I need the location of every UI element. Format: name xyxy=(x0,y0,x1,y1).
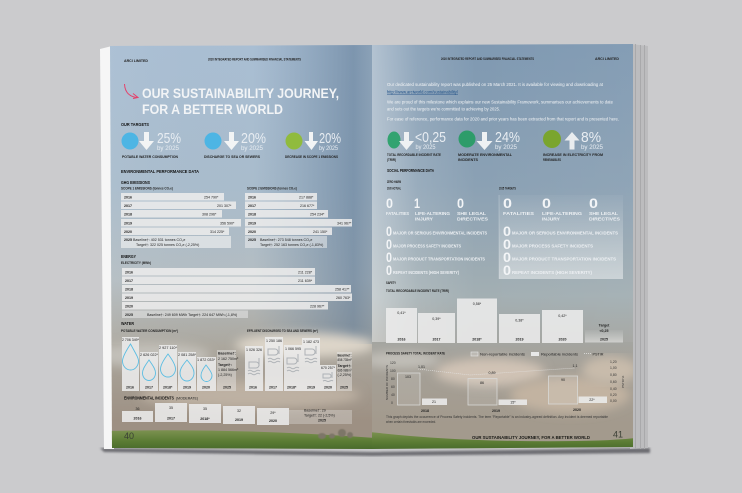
chart: potable water: (-2,25%) xyxy=(218,373,232,377)
chart: scope 1 emissions: 254 790* xyxy=(204,195,219,199)
chart: effluent: 1 066 595 xyxy=(285,347,301,351)
chart: effluent: 2017 xyxy=(269,386,277,390)
chart: process safety: 22* xyxy=(589,398,595,402)
target: environmental incidents: INCIDENTS xyxy=(458,158,479,162)
target: environmental incidents: 24% xyxy=(495,129,520,146)
chart: process safety: PSTIR % xyxy=(621,375,625,388)
chart: potable water: 1 884 566m³ xyxy=(218,368,239,372)
chart: potable water: 2016 xyxy=(126,386,134,390)
chart: scope 2 emissions: SCOPE 2 EMISSIONS (tonnes CO₂e) xyxy=(247,186,298,190)
panel: 2025 targets: REPEAT INCIDENTS (HIGH SEVERITY) xyxy=(512,270,593,275)
right page content xyxy=(385,57,625,440)
panel: 2025 targets: MAJOR OR SERIOUS ENVIRONMENTAL INCIDENTS xyxy=(512,230,618,236)
chart: process safety: 1,20 xyxy=(610,360,617,364)
target: renewables: INCREASE IN ELECTRICITY FROM xyxy=(543,153,603,157)
legend xyxy=(471,352,604,356)
chart: environmental incidents: Baseline†: 29 xyxy=(304,408,326,412)
panel: 2020 actual: MAJOR PROCESS SAFETY INCIDENTS xyxy=(393,244,461,248)
chart: energy electricity: 2025 xyxy=(125,313,133,317)
chart: potable water: 2 927 110* xyxy=(159,346,178,350)
intro text: For ease of reference, performance data for 2020 and prior years has been extracted from that report and is presented here. xyxy=(387,116,619,122)
chart: energy electricity: 2018 xyxy=(125,287,133,291)
chart: process safety: 0 xyxy=(391,401,393,405)
chart: environmental incidents: 2017 xyxy=(167,416,175,420)
chart: TRIR: 2016 xyxy=(398,338,406,342)
chart: potable water: Baseline†: xyxy=(218,352,236,356)
panel: 2020 actual: 0 xyxy=(386,223,392,239)
chart: process safety: 0,20 xyxy=(610,393,617,397)
chart: process safety: 1,1 xyxy=(572,364,578,368)
chart: TRIR: 2020 xyxy=(558,338,566,342)
intro text: We are proud of this milestone which explains our new Sustainability Framework, summarises our achievements to date xyxy=(387,100,614,104)
chart: process safety: 80 xyxy=(391,377,395,381)
chart: scope 2 emissions: 2019 xyxy=(248,221,256,225)
page number 40: 40 xyxy=(124,431,134,441)
chart: environmental incidents: ENVIRONMENTAL INCIDENTS xyxy=(124,396,174,400)
chart: scope 2 emissions: 217 888* xyxy=(299,195,314,199)
chart: process safety: 15* xyxy=(510,400,516,404)
panel: 2025 targets: 0 xyxy=(589,195,598,211)
panel: 2025 targets: 2025 TARGETS xyxy=(499,186,516,190)
target: renewables xyxy=(543,129,603,162)
target: environmental incidents: MODERATE ENVIRONMENTAL xyxy=(458,153,513,157)
panel: 2025 targets: FATALITIES xyxy=(503,211,534,216)
chart: process safety: 103 xyxy=(405,375,411,379)
chart: environmental incidents xyxy=(122,396,352,425)
chart: scope 2 emissions: 2017 xyxy=(248,204,256,208)
chart: energy electricity: 211 639* xyxy=(298,279,313,283)
chart: effluent: 2025 xyxy=(340,386,348,390)
chart: effluent: 2016 xyxy=(249,386,257,390)
target: scope 1: by 2025 xyxy=(319,145,338,152)
target: scope 1: DECREASE IN SCOPE 1 EMISSIONS xyxy=(285,155,339,159)
chart: TRIR: 0,42* xyxy=(558,314,567,318)
chart: process safety: 0,40 xyxy=(610,387,617,391)
chart: TRIR: 2017 xyxy=(432,338,440,342)
chart: TRIR xyxy=(386,281,623,343)
panel: 2020 actual: 0 xyxy=(386,262,392,278)
chart: effluent: 2020 xyxy=(324,386,332,390)
target: TRIR: (TRIR) xyxy=(387,158,397,162)
chart: TRIR: 0,41* xyxy=(397,311,406,315)
page edge left xyxy=(100,46,114,449)
footnote xyxy=(386,415,608,424)
panel: 2020 actual: SHE LEGAL xyxy=(457,211,486,216)
chart: potable water: WATER xyxy=(121,321,135,326)
chart: process safety: 60 xyxy=(391,385,395,389)
chart: process safety xyxy=(385,352,625,413)
chart: process safety: 0,60 xyxy=(610,380,617,384)
chart: scope 1 emissions: 314 225* xyxy=(210,230,225,234)
chart: energy electricity: 2016 xyxy=(125,270,133,274)
chart: scope 2 emissions: 254 234* xyxy=(310,212,325,216)
chart: process safety: 2018 xyxy=(421,409,429,413)
panel: 2025 targets: 0 xyxy=(503,262,511,278)
panel: 2020 actual: INJURY xyxy=(415,216,433,222)
target: renewables: 8% xyxy=(581,129,601,146)
chart: potable water: 2017 xyxy=(145,386,153,390)
panel: 2025 targets: 0 xyxy=(503,223,511,239)
chart: scope 1 emissions: 2025 xyxy=(124,238,132,242)
panel: 2020 actual: 2020 ACTUAL xyxy=(387,186,401,190)
title xyxy=(142,86,339,117)
footnote: This graph depicts the occurrence of Process Safety incidents. The term "Reportable" is an industry-agreed definition. Any incident is deemed reportable xyxy=(386,415,608,419)
target: TRIR: <0,25 xyxy=(415,129,446,146)
panel: 2025 targets: MAJOR PRODUCT TRANSPORTATION INCIDENTS xyxy=(512,256,616,262)
target: scope 1 xyxy=(285,130,341,159)
chart: scope 2 emissions: 2025 xyxy=(248,238,256,242)
chart: energy electricity: Baseline†: 249 609 MWh Target†: 224 647 MWh (-1,8%) xyxy=(147,313,237,317)
chart: process safety: 90 xyxy=(561,378,565,382)
chart: TRIR: 0,58* xyxy=(473,302,482,306)
panel: 2025 targets: 0 xyxy=(503,236,511,252)
chart: process safety: NUMBER OF INCIDENTS xyxy=(385,365,389,400)
chart: process safety: 21 xyxy=(432,400,436,404)
running header right: 2020 INTEGRATED REPORT AND SUMMARISED FINANCIAL STATEMENTS xyxy=(441,57,534,61)
chart: scope 2 emissions: 216 677* xyxy=(300,204,315,208)
panel: 2020 actual: 0 xyxy=(386,236,392,252)
chart: energy electricity: 260 763* xyxy=(336,296,351,300)
target: TRIR xyxy=(387,129,446,162)
chart: potable water: POTABLE WATER CONSUMPTION (m³) xyxy=(121,329,179,333)
chart: environmental incidents: 35 xyxy=(203,407,207,411)
chart: energy electricity: 228 967* xyxy=(310,304,325,308)
chart: potable water: 2018* xyxy=(163,386,173,390)
chart: potable water: 2 162 750m³ xyxy=(218,357,239,361)
target: environmental incidents xyxy=(458,129,520,162)
heading: our targets: OUR TARGETS xyxy=(121,122,149,127)
chart: scope 1 emissions: 2020 xyxy=(124,230,132,234)
legend: PSTIR xyxy=(592,352,604,356)
target: discharge: 20% xyxy=(241,130,266,147)
chart: energy electricity: ELECTRICITY (MWh) xyxy=(121,261,152,265)
chart: environmental incidents: 2018* xyxy=(200,417,210,421)
panel: 2020 actual xyxy=(386,180,488,278)
chart: process safety: 100 xyxy=(390,369,396,373)
chart: effluent: (-2,25%) xyxy=(338,373,351,377)
chart: potable water: 2025 xyxy=(223,386,231,390)
chart: effluent: Baseline†: xyxy=(338,354,352,358)
chart: potable water: 2 081 258* xyxy=(178,353,197,357)
chart: scope 1 emissions: GHG EMISSIONS xyxy=(121,180,150,185)
chart: process safety: PROCESS SAFETY TOTAL INCIDENT RATE xyxy=(386,352,445,356)
chart: potable water: 2019 xyxy=(183,386,191,390)
chart: environmental incidents: 32 xyxy=(237,409,241,413)
panel: 2020 actual: 0 xyxy=(457,195,464,211)
chart: TRIR: <0,25 xyxy=(599,329,609,333)
chart: TRIR: 0,38* xyxy=(515,318,524,322)
target: scope 1: 20% xyxy=(319,130,341,147)
panel: 2020 actual: ZERO HARM xyxy=(387,180,401,184)
chart: TRIR: 2025 xyxy=(600,338,608,342)
chart: scope 1 emissions: 308 296* xyxy=(202,212,217,216)
panel: 2020 actual: LIFE-ALTERING xyxy=(415,211,451,216)
running header left xyxy=(124,58,301,63)
chart: scope 1 emissions: SCOPE 1 EMISSIONS (tonnes CO₂e) xyxy=(121,186,174,190)
chart: environmental incidents: 2025 xyxy=(318,418,326,422)
chart: process safety: 0,00 xyxy=(610,399,617,403)
page edge stack right xyxy=(630,44,648,449)
target: potable water xyxy=(122,130,181,159)
legend: Reportable incidents xyxy=(541,352,578,356)
target: potable water: POTABLE WATER CONSUMPTION xyxy=(122,155,178,159)
chart: potable water: 2 626 022* xyxy=(140,353,159,357)
chart: energy electricity: 2020 xyxy=(125,304,133,308)
intro text: Our dedicated sustainability report was published on 25 March 2021. It is available for viewing and downloading at xyxy=(387,82,604,87)
chart: environmental incidents: (MODERATE) xyxy=(176,396,198,400)
chart: scope 2 emissions xyxy=(245,186,352,248)
running header left: ARCI LIMITED xyxy=(124,59,148,63)
panel: 2020 actual: DIRECTIVES xyxy=(457,216,488,222)
chart: effluent: 2019 xyxy=(307,386,315,390)
target: discharge: by 2025 xyxy=(241,145,263,152)
target: renewables: RENEWABLES xyxy=(543,158,561,162)
heading: environmental performance data: ENVIRONMENTAL PERFORMANCE DATA xyxy=(121,169,200,174)
chart: effluent: 1 026 326 xyxy=(246,348,262,352)
target: potable water: by 2025 xyxy=(157,145,179,152)
panel: 2025 targets: DIRECTIVES xyxy=(589,216,620,222)
target: renewables: by 2025 xyxy=(581,144,603,151)
chart: potable water: Target†: xyxy=(218,363,232,367)
chart: process safety: 0,89 xyxy=(488,371,496,375)
chart: scope 1 emissions: Baseline†: 402 531 tonnes CO₂e xyxy=(133,238,185,242)
chart: scope 1 emissions: 2016 xyxy=(124,195,132,199)
chart: TRIR: TOTAL RECORDABLE INCIDENT RATE (TRIR) xyxy=(386,289,450,293)
chart: effluent: 1 182 473 xyxy=(303,340,319,344)
chart: scope 2 emissions: Baseline†: 273 548 tonnes CO₂e xyxy=(260,238,312,242)
left page content xyxy=(121,58,352,441)
heading: social performance data: SOCIAL PERFORMANCE DATA xyxy=(387,168,434,173)
legend: Non-reportable incidents xyxy=(480,352,525,356)
chart: environmental incidents: 2020 xyxy=(269,419,277,423)
chart: scope 1 emissions: 356 590* xyxy=(220,221,235,225)
chart: energy electricity: 2019 xyxy=(125,296,133,300)
chart: process safety: 1,01 xyxy=(418,365,425,369)
target: discharge: DISCHARGE TO SEA OR SEWERS xyxy=(204,155,261,159)
chart: environmental incidents: 36 xyxy=(136,407,140,411)
chart: energy electricity xyxy=(121,254,352,318)
panel: 2025 targets: SHE LEGAL xyxy=(589,211,618,216)
panel: 2025 targets: 0 xyxy=(503,195,512,211)
chart: scope 2 emissions: Target†: 252 163 tonnes CO₂e (-1,83%) xyxy=(260,243,323,247)
chart: effluent: Target†: xyxy=(338,364,351,368)
running header left: 2020 INTEGRATED REPORT AND SUMMARISED FINANCIAL STATEMENTS xyxy=(208,58,301,62)
chart: process safety: 2019 xyxy=(492,409,500,413)
chart: effluent: 670 257* xyxy=(321,366,336,370)
panel: 2020 actual: FATALITIES xyxy=(386,211,409,216)
panel: 2020 actual: 1 xyxy=(414,195,420,211)
panel: 2020 actual: MAJOR OR SERIOUS ENVIRONMENTAL INCIDENTS xyxy=(393,230,487,236)
chart: environmental incidents: 2019 xyxy=(235,418,243,422)
chart: effluent: 1 250 186 xyxy=(266,339,282,343)
chart: scope 1 emissions: 2017 xyxy=(124,204,132,208)
chart: potable water: 1 872 033* xyxy=(197,358,216,362)
chart: process safety: 86 xyxy=(480,381,484,385)
target: TRIR: by 2025 xyxy=(416,144,436,151)
chart: scope 1 emissions: 2019 xyxy=(124,221,132,225)
chart: potable water: 2 706 349* xyxy=(122,338,140,342)
chart: TRIR: SAFETY xyxy=(386,281,396,285)
chart: process safety: 40 xyxy=(391,393,395,397)
panel: 2025 targets xyxy=(499,186,623,279)
chart: scope 2 emissions: 341 967* xyxy=(337,221,352,225)
chart: scope 2 emissions: 2016 xyxy=(248,195,256,199)
chart: TRIR: 0,39* xyxy=(432,317,441,321)
panel: 2020 actual: 0 xyxy=(386,195,393,211)
footnote: when certain thresholds are exceeded. xyxy=(386,420,436,424)
book shadow xyxy=(100,448,650,456)
chart: environmental incidents: 29* xyxy=(270,411,276,415)
chart: scope 1 emissions: 201 307* xyxy=(217,204,232,208)
intro text: and sets out the targets we're committed to achieving by 2025. xyxy=(387,106,500,112)
chart: process safety: 120 xyxy=(390,361,396,365)
intro text: http://www.arciworld.com/sustainability/ xyxy=(387,90,459,94)
chart: process safety: 0,80 xyxy=(610,373,617,377)
panel: 2025 targets: INJURY xyxy=(542,216,560,222)
footer title: OUR SUSTAINABILITY JOURNEY, FOR A BETTER WORLD xyxy=(472,435,590,440)
panel: 2025 targets: 0 xyxy=(542,195,551,211)
panel: 2020 actual: MAJOR PRODUCT TRANSPORTATION INCIDENTS xyxy=(393,256,485,262)
chart: energy electricity: 2017 xyxy=(125,279,133,283)
left page background xyxy=(90,44,375,452)
target: discharge xyxy=(204,130,266,159)
target: environmental incidents: by 2025 xyxy=(495,144,517,151)
chart: environmental incidents: 35 xyxy=(169,406,173,410)
chart: environmental incidents: Target†: 22 (-2,5%) xyxy=(304,414,335,418)
panel: 2020 actual: REPEAT INCIDENTS (HIGH SEVERITY) xyxy=(393,270,459,275)
chart: process safety: 2020 xyxy=(573,408,581,412)
chart: energy electricity: 211 228* xyxy=(298,270,313,274)
right page background xyxy=(360,42,638,452)
chart: potable water xyxy=(121,321,239,391)
target: TRIR: TOTAL RECORDABLE INCIDENT RATE xyxy=(387,153,441,157)
chart: environmental incidents: 2016 xyxy=(134,416,142,420)
chart: scope 2 emissions: 241 150* xyxy=(313,230,328,234)
chart: effluent xyxy=(245,329,352,391)
chart: TRIR: Target xyxy=(599,324,610,328)
chart: effluent: EFFLUENT DISCHARGED TO SEA AND SEWERS (m³) xyxy=(247,329,319,333)
chart: effluent: 858 735m³ xyxy=(338,358,352,362)
target: potable water: 25% xyxy=(157,130,181,147)
panel: 2025 targets: LIFE-ALTERING xyxy=(542,211,583,216)
chart: energy electricity: ENERGY xyxy=(121,254,136,259)
running header right: ARCI LIMITED xyxy=(595,57,619,61)
icon: red arrow xyxy=(124,84,138,98)
chart: TRIR: 2018* xyxy=(472,338,482,342)
chart: scope 2 emissions: 2020 xyxy=(248,230,256,234)
panel: 2020 actual: 0 xyxy=(386,249,392,265)
title: OUR SUSTAINABILITY JOURNEY, xyxy=(142,86,339,101)
chart: scope 2 emissions: 2018 xyxy=(248,212,256,216)
intro text xyxy=(387,82,619,122)
page number 41: 41 xyxy=(613,430,623,440)
chart: effluent: 686 988m³ xyxy=(338,368,352,372)
chart: potable water: 2020 xyxy=(202,386,210,390)
chart: energy electricity: 258 417* xyxy=(335,287,350,291)
chart: scope 1 emissions: Target†: 322 025 tonnes CO₂e (-2,25%) xyxy=(136,243,199,247)
chart: process safety: 1,00 xyxy=(610,366,617,370)
chart: scope 1 emissions xyxy=(121,180,241,248)
panel: 2025 targets: MAJOR PROCESS SAFETY INCIDENTS xyxy=(512,244,593,248)
title: FOR A BETTER WORLD xyxy=(142,102,283,117)
chart: effluent: 2018* xyxy=(287,386,297,390)
chart: TRIR: 2019 xyxy=(516,338,524,342)
panel: 2025 targets: 0 xyxy=(503,249,511,265)
chart: scope 1 emissions: 2018 xyxy=(124,212,132,216)
